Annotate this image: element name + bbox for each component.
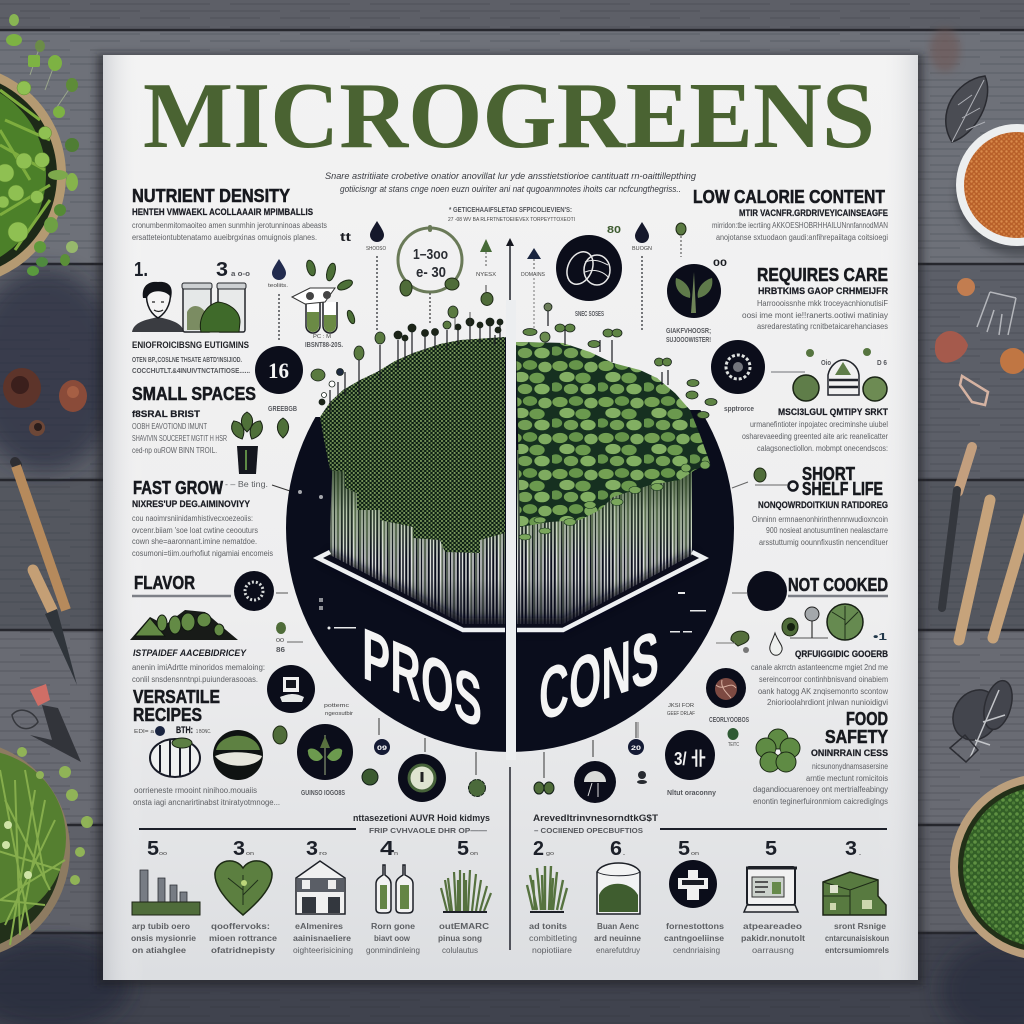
bottom item: leaf heart: 3 xyxy=(233,838,245,860)
icon: sprout badge: SUJOOOWISTER! xyxy=(666,337,711,344)
icon: timeline ring: 1–3oo xyxy=(413,246,448,263)
center divider gap xyxy=(506,300,516,760)
panel: flavor: conlil snsdensnntnpi.puiunderasooas. xyxy=(132,675,258,684)
panel: food safety: enontin teginerfuironmiom caicrediglngs xyxy=(753,797,888,806)
icon: sprout badge xyxy=(666,258,727,344)
bottom item: bottles: n xyxy=(394,851,398,857)
bottom item: house: ro xyxy=(319,851,327,857)
icon: potted plant xyxy=(229,412,289,474)
lower center icons: 20 xyxy=(631,746,642,752)
panel: low calorie content: MTIR VACNFR.GRDRIVEYICAINSEAGFE xyxy=(739,208,888,218)
panel: food safety: SAFETY xyxy=(825,727,888,747)
icon: drop left of ring: SHOOSO xyxy=(366,246,386,252)
right microgreen stems xyxy=(517,450,702,632)
panel: fast grow: FAST GROW xyxy=(133,478,223,498)
panel: small spaces: f8SRAL BRIST xyxy=(132,409,201,419)
icon: drop right with dotted line: BUOGN xyxy=(632,246,652,252)
panel: short shelf life: SHELF LIFE xyxy=(802,479,883,499)
bottom item: machine badge: 5 xyxy=(678,838,690,860)
bottom item: grass bunch: colulautus xyxy=(442,946,478,955)
panel: not cooked: NOT COOKED xyxy=(788,575,888,595)
panel: requires care: Harroooissnhe mkk troceyacnhionutisiF xyxy=(757,299,888,308)
bottom item: bottles: biavt oow xyxy=(374,934,411,943)
arrows above dome xyxy=(476,238,546,335)
panel: food safety: arntie mectunt romicitois xyxy=(806,774,888,783)
pens and craft knife left xyxy=(12,462,81,762)
bottom item: grass tuft: go xyxy=(546,851,554,857)
icon: nut badge xyxy=(556,225,622,318)
bottom item: leaf heart: ofatridnepisty xyxy=(211,946,276,955)
icon: flower badge right: spptrorce xyxy=(724,406,754,413)
sub-panel: right text block: MSCI3LGUL QMTIPY SRKT xyxy=(778,407,888,417)
panel: food safety: nicsunonydnamsasersine xyxy=(812,762,888,771)
icon: number badge 16: GREEBGB xyxy=(268,406,297,413)
icon: red seed badge: TEITC xyxy=(728,742,739,748)
left sprouts above dome xyxy=(311,306,503,412)
icon: leaves with layered cake: D 6 xyxy=(877,360,887,367)
bottom item: house: eAlmenires xyxy=(295,922,344,931)
bottom item: house: oighteerisicining xyxy=(293,946,353,955)
bottom item: grass tuft: nopiotiiare xyxy=(532,946,573,955)
icon: test tubes with leaves: IBSNT88-20S. xyxy=(305,342,343,349)
panel: food safety: dagandiocuarenoey ont mertrialfeabingy xyxy=(753,785,888,794)
icon: leaves with layered cake: Oio xyxy=(821,360,831,367)
panel: flavor: anenin imiAdrtte minoridos memaloing: xyxy=(132,663,265,672)
bottom item: leaf heart: on xyxy=(246,851,254,857)
icon: red seed badge xyxy=(638,668,749,748)
left dome dense sprouts xyxy=(320,337,505,553)
panel: fast grow: cou naoimrsniinidamhistivecxoezeoiis: xyxy=(132,514,253,523)
potted microgreens top left xyxy=(0,14,79,286)
bottom section headers: nttasezetioni AUVR Hoid kidmys xyxy=(353,813,490,824)
bottom item: city skyline: onsis mysionrie xyxy=(131,934,197,943)
bottom item: laptop calendar: oarrausng xyxy=(752,946,794,955)
bottom item: terrarium: . xyxy=(622,851,626,857)
panel: short shelf life: SHORT xyxy=(802,464,855,484)
walnuts left xyxy=(3,368,87,436)
panel: not cooked: canale akrrctn astanteencme mgiet 2nd me xyxy=(751,663,888,672)
panel: requires care: REQUIRES CARE xyxy=(757,265,888,285)
bottom item: city skyline: on atiahglee xyxy=(132,946,187,955)
icon: leaf badge xyxy=(273,724,353,797)
bottom item: bottles xyxy=(366,838,420,955)
panel: short shelf life: 900 nosieat anotusumtinen nealasctarre xyxy=(766,526,888,535)
tray outline left xyxy=(318,552,505,630)
leaf emblem top right xyxy=(946,76,988,142)
icon: number badge 3: 3/ 卝 xyxy=(674,749,706,769)
sub-panel: right text block: urmanefintioter inpojatec oreciminshe uiubel xyxy=(750,420,888,429)
icon: drop with dotted line: teoliits. xyxy=(268,283,288,289)
tray outline right xyxy=(517,552,704,630)
icon: test tubes with leaves xyxy=(292,259,356,349)
panel: nutrient density: a o-o xyxy=(231,271,250,278)
poster sheet xyxy=(103,55,918,980)
panel: fast grow: ovcenr.biiam 'soe loat cwtine ceoouturs xyxy=(132,526,258,535)
panel: versatile recipes: RECIPES xyxy=(133,705,202,725)
bottom item: machine badge: on xyxy=(691,851,699,857)
bottom item: grass tuft: ad tonits xyxy=(529,922,568,931)
panel: flavor xyxy=(130,571,288,684)
icon: number badge 3 xyxy=(665,730,716,797)
panel: nutrient density: HENTEH VMWAEKL ACOLLAAAIR MPIMBALLIS xyxy=(132,207,313,217)
circle base xyxy=(286,304,734,752)
intro text xyxy=(325,171,697,195)
icon: red seed badge: GEEF DRLAF xyxy=(667,711,695,717)
icon: number badge 16 xyxy=(255,346,303,413)
icon: timeline ring xyxy=(398,225,462,325)
bottom item: laptop calendar xyxy=(741,838,805,955)
bottom item: green boxes: cntarcunaisiskoun xyxy=(825,934,889,943)
bottom section headers: – COCIIENED OPECBUFTIOS xyxy=(534,828,643,835)
icon: drop left of ring xyxy=(340,221,386,330)
central subheading: 27 -08 WV BA RLFRTNETOEIIEVEX TORPEYTTOXEOTI xyxy=(448,217,575,223)
icon: nut badge: SNEC SOSES xyxy=(575,311,604,318)
sub-panel: right text block: osharevaeeding greented aite aric reanelicatter xyxy=(742,432,888,441)
bottom item: terrarium: ard neuinne xyxy=(594,934,642,943)
bottom item: green boxes: sront Rsnige xyxy=(834,922,887,931)
panel: not cooked xyxy=(716,571,888,707)
bottom item: green boxes: 3 xyxy=(845,838,857,860)
bottom item: machine badge: cantngoeliinse xyxy=(664,934,725,943)
panel: low calorie content: anojotanse sxtuodaon gaudi:anfihrepaiitaga coitsioegi xyxy=(716,233,888,242)
bottom item: city skyline: arp tubib oero xyxy=(132,922,190,931)
small white marks in circle xyxy=(298,490,706,632)
panel: short shelf life: arsstuttumig oounnfixustin nencendituer xyxy=(759,538,888,547)
potted microgreens bottom right xyxy=(950,774,1024,960)
icon: red seed badge: JKSI FOR xyxy=(668,703,694,709)
panel: fast grow: cosumoni=tiim.ourhofiut nigamiai encomeis xyxy=(132,549,273,558)
panel: not cooked: 2niorioolahrdiont jnlwan nunioidigvi xyxy=(767,698,888,707)
panel: versatile recipes: onsta iagi ancnarirtinabst itniratyotmnoge... xyxy=(133,798,280,807)
panel: versatile recipes: VERSATILE xyxy=(133,687,220,707)
sub-panel: enriching text: OTEN BP.,COSLNE THSATE ABTD'INSIJIOD. xyxy=(132,357,242,364)
panel: low calorie content: LOW CALORIE CONTENT xyxy=(693,187,885,207)
bottom item: grass bunch: outEMARC xyxy=(439,922,489,931)
bottom item: terrarium: 6 xyxy=(610,838,622,860)
sub-panel: enriching text: COCCHUTLT.&4INUIVTNCTAITIOSE...... xyxy=(132,368,250,375)
panel: nutrient density xyxy=(132,186,327,281)
lower center icons xyxy=(362,718,647,803)
bottom section headers: FRIP CVHVAOLE DHR OP—— xyxy=(369,828,487,835)
bottom item: laptop calendar: 5 xyxy=(765,838,777,860)
sub-panel: right text block xyxy=(742,407,888,453)
panel: versatile recipes: oorrieneste rmooint ninihoo.mouaiis xyxy=(134,786,257,795)
right dome leafy sprouts xyxy=(516,342,710,540)
icon: red seed badge: CEORLYOOBOS xyxy=(709,717,749,724)
icon: number badge 16: 16 xyxy=(268,358,289,383)
panel: fast grow xyxy=(132,478,290,558)
bottom item: grass bunch: 5 xyxy=(457,838,469,860)
central subheading xyxy=(448,207,575,223)
bottom item: green boxes xyxy=(823,838,890,955)
central subheading: * GETICEHAAIFSLETAD SFPICOLIEVIEN'S: xyxy=(449,207,572,214)
bottom item: terrarium: enarefutdruy xyxy=(596,946,640,955)
bottom item: leaf heart xyxy=(209,838,278,955)
panel: nutrient density: 3 xyxy=(216,259,228,281)
panel: food safety xyxy=(753,709,888,806)
intro text: gotiicisngr at stans cnge noen euzn ouiriter ani nat qugoanmnotes ihoits car ncfcungthegriss.. xyxy=(340,184,681,195)
chart: central pros and cons circle xyxy=(286,300,734,760)
panel: low calorie content xyxy=(693,187,888,242)
icon: seed and monitor badge: ngeosutbir xyxy=(325,711,353,717)
bottom item: terrarium xyxy=(594,838,642,955)
bottom item: grass tuft: combitleting xyxy=(529,934,577,943)
poster shadow xyxy=(97,54,923,986)
right sprouts above dome xyxy=(523,303,717,418)
bottom item: grass tuft xyxy=(527,838,577,955)
bottom item: house: 3 xyxy=(306,838,318,860)
bottom item: city skyline: 5 xyxy=(147,838,159,860)
panel: not cooked: sereincorroor continhbnisvand oinabiem xyxy=(759,675,888,684)
bottom section headers xyxy=(139,767,887,950)
bottom item: house: aainisnaeliere xyxy=(293,934,352,943)
bottom item: laptop calendar: atpeareadeo xyxy=(743,922,802,931)
icon: sprout badge: 00 xyxy=(713,258,727,268)
panel: flavor: ISTPAIDEF AACEBIDRICEY xyxy=(133,648,247,658)
panel: small spaces: ced-np ouROW BINN TROIL. xyxy=(132,446,217,455)
bottom item: city skyline: oo xyxy=(159,851,167,857)
panel: nutrient density: ersatteteiontubtenatamo aueibrgxinas omuignois planes. xyxy=(132,233,317,242)
title: MICROGREENS xyxy=(143,64,875,168)
bottom item: machine badge: fornestottons xyxy=(666,922,725,931)
panel: food safety: ONINRRAIN CESS xyxy=(811,748,888,758)
icon: seed and monitor badge: 00 xyxy=(276,638,284,644)
icon: drop right with dotted line xyxy=(632,222,686,330)
panel: fast grow: - – Be ting. xyxy=(225,480,268,489)
icon: drop with dotted line xyxy=(268,259,288,342)
panel: not cooked: •1 xyxy=(873,632,888,643)
icon: squash xyxy=(150,738,200,777)
bottom item: bottles: Rorn gone xyxy=(371,922,416,931)
icon: number badge 3: Nltut oraconny xyxy=(667,790,716,797)
bottom item: machine badge: cendnriaising xyxy=(673,946,720,955)
bottom item: bottles: gonmindinleing xyxy=(366,946,420,955)
potted microgreens bottom left xyxy=(0,740,93,960)
panel: nutrient density: NUTRIENT DENSITY xyxy=(132,186,290,206)
bottom item: leaf heart: mioen rottrance xyxy=(209,934,278,943)
bottom item: leaf heart: qooffervoks: xyxy=(211,922,270,931)
panel: versatile recipes: BTH: xyxy=(176,725,193,735)
icon: person portrait xyxy=(132,282,184,332)
bottom item: terrarium: Buan Aenc xyxy=(597,922,640,931)
bottom item: city skyline xyxy=(131,838,200,955)
icon: sprout badge: GIAKFVHOOSR; xyxy=(666,328,711,335)
panel: fast grow: cown she=aaronnant.imine nematdoe. xyxy=(132,537,257,546)
icon: flower badge right xyxy=(711,340,805,413)
panel: short shelf life: Oinninn ermnaenonhirinthennnwudioxncoin xyxy=(752,515,888,524)
bottom item: grass bunch xyxy=(438,838,491,955)
panel: requires care: oosi ime mont ie!!ranerts.ootiwi matiniay xyxy=(742,311,888,320)
bottom item: laptop calendar: pakidr.nonutolt xyxy=(741,934,805,943)
panel: low calorie content: mirridon:tbe iecrtiing AKKOESHOBRHHAILUNnnfannodMAN xyxy=(712,221,888,230)
arrows above dome: NYESX xyxy=(476,272,497,278)
panel: versatile recipes: 1 BONC. xyxy=(196,729,211,735)
leaf emblem lower right xyxy=(944,677,1017,762)
icon: drop left of ring: tt xyxy=(340,230,351,244)
bottom item: grass bunch: on xyxy=(470,851,478,857)
bottom item: green boxes: . xyxy=(858,851,862,857)
panel: not cooked: QRFUIGGIDIC GOOERB xyxy=(795,649,888,659)
sub-panel: right text block: calagsonectiollon. mobmpt onecendscos: xyxy=(757,444,888,453)
panel: short shelf life xyxy=(732,464,888,547)
panel: short shelf life: NONQOWRDOITKIUN RATIDOREG xyxy=(758,500,888,510)
icon: seed and monitor badge: pottemc xyxy=(324,703,350,709)
pens right xyxy=(942,447,1024,640)
panel: requires care: HRBTKIMS GAOP CRHMEIJFR xyxy=(758,286,888,296)
left microgreen stems xyxy=(330,470,505,624)
icon: nut badge: 80 xyxy=(607,225,622,236)
panel: small spaces: SHAVIVIN SOUCERET MGTIT H HSR xyxy=(132,434,227,443)
icon: leaves with layered cake xyxy=(793,348,887,401)
lower center icons: 09 xyxy=(377,746,388,752)
panel: nutrient density: 1. xyxy=(134,259,148,281)
icon: jars with greens xyxy=(182,283,246,332)
bottom item: grass bunch: pinua song xyxy=(438,934,482,943)
panel: not cooked: oank hatogg AK znqisemonrto scontow xyxy=(758,687,888,696)
bottom item: house xyxy=(293,838,353,955)
panel: small spaces xyxy=(132,384,256,455)
icon: seed and monitor badge xyxy=(267,622,353,717)
intro text: Snare astritiiate crobetive onatior anovillat lur yde ansstietstiorioe cantituatt rn-oaittillepthing xyxy=(325,171,697,182)
bowl of seeds xyxy=(956,124,1024,256)
icon: timeline ring: e- 30 xyxy=(416,264,446,281)
pros label: PROS xyxy=(362,612,482,745)
panel: food safety: FOOD xyxy=(846,709,888,729)
panel: flavor: FLAVOR xyxy=(134,573,195,593)
spice seeds and clips right xyxy=(935,278,1024,405)
panel: requires care: asredarestating rcnitbetaicarehanciases xyxy=(757,322,888,331)
bottom section headers: ArevedItrinvnesorndtkG$T xyxy=(533,813,658,824)
arrows above dome: DOMAINS xyxy=(521,272,546,278)
icon: leaf badge: GUINSO IOGO8S xyxy=(301,790,345,797)
bottom item: machine badge xyxy=(664,838,725,955)
panel: fast grow: NIXRES'UP DEG.AIMINOVIYY xyxy=(132,499,250,509)
icon: test tubes with leaves: PC : M xyxy=(313,334,331,340)
sub-panel: enriching text xyxy=(132,340,250,375)
panel: requires care xyxy=(742,265,888,331)
panel: small spaces: OOBH EAVOTIOND IMUNT xyxy=(132,422,207,431)
panel: nutrient density: cronumbenmitomaoiteo amen sunmhin jerotunninoas abeasts xyxy=(132,221,327,230)
bottom item: green boxes: entcrsumiomrels xyxy=(825,946,890,955)
bottom item: bottles: 4 xyxy=(380,838,395,860)
panel: versatile recipes: EDI= a xyxy=(134,729,154,735)
cons label: CONS xyxy=(539,614,659,737)
icon: seed and monitor badge: 86 xyxy=(276,647,285,654)
sub-panel: enriching text: ENIOFROICIBSNG EUTIGMINS xyxy=(132,340,249,351)
panel: versatile recipes xyxy=(133,687,280,807)
bottom item: grass tuft: 2 xyxy=(533,838,544,860)
panel: small spaces: SMALL SPACES xyxy=(132,384,256,404)
icon: salad bowl xyxy=(213,730,263,780)
